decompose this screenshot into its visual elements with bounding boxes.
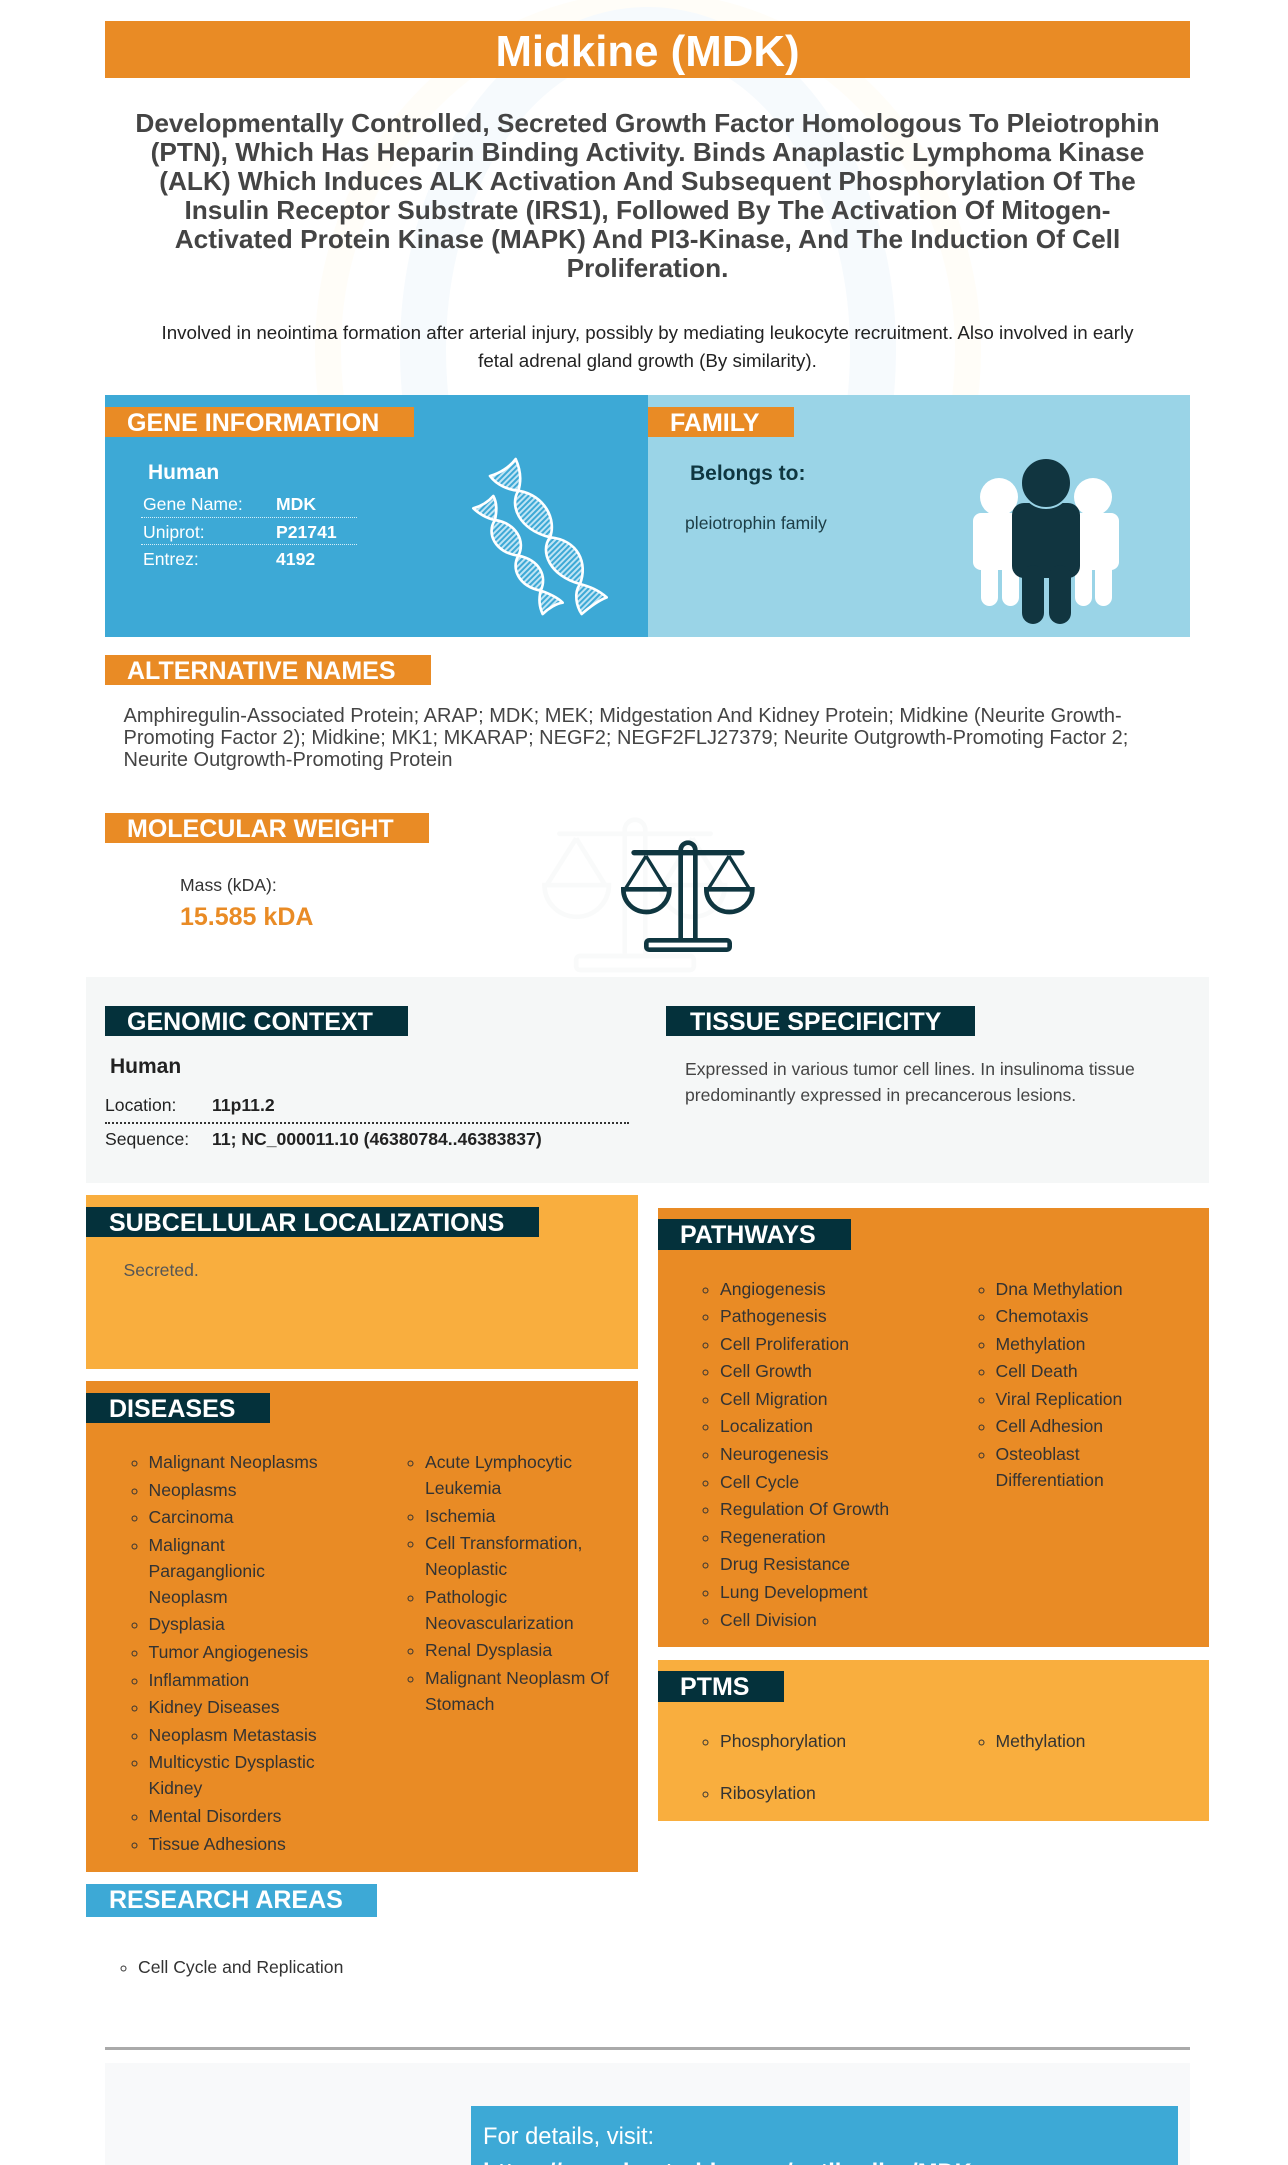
localization text: Secreted. bbox=[124, 1260, 199, 1280]
diseases list column 1 bbox=[132, 1452, 318, 1854]
mass label: Mass (kDA): bbox=[180, 875, 277, 895]
panel: PTMs bbox=[658, 1660, 1209, 1821]
diseases list column 2: Acute Lymphocytic bbox=[425, 1452, 572, 1472]
diseases list column 1: Kidney Diseases bbox=[148, 1697, 280, 1717]
heading: gene information: GENE INFORMATION bbox=[127, 409, 379, 437]
diseases list column 2: Neovascularization bbox=[425, 1613, 574, 1633]
heading: pathways: PATHWAYS bbox=[680, 1221, 816, 1249]
pathways list column 2: Viral Replication bbox=[996, 1389, 1122, 1409]
pathways list column 1: Cell Division bbox=[720, 1610, 817, 1630]
diseases list column 1: Inflammation bbox=[148, 1670, 249, 1690]
gene details table: 4192 bbox=[276, 549, 315, 569]
diseases list column 2 bbox=[408, 1452, 609, 1714]
pathways list column 2: Methylation bbox=[996, 1334, 1085, 1354]
species label: Human bbox=[110, 1055, 181, 1078]
icon: balance scale bbox=[621, 840, 755, 952]
alternative names text bbox=[124, 705, 1128, 771]
alternative names text: Neurite Outgrowth-Promoting Protein bbox=[124, 749, 453, 771]
alternative names text: Amphiregulin-Associated Protein; ARAP; MDK; MEK; Midgestation And Kidney Protein; Midkine (Neurite Growth- bbox=[124, 705, 1122, 727]
heading: family bbox=[648, 407, 794, 437]
location row: Location: bbox=[105, 1095, 176, 1115]
diseases list column 1: Dysplasia bbox=[148, 1614, 225, 1634]
pathways list column 2: Differentiation bbox=[996, 1470, 1104, 1490]
pathways list column 1 bbox=[702, 1278, 889, 1630]
panel: diseases bbox=[86, 1381, 638, 1872]
PTM list column 1: Phosphorylation bbox=[720, 1731, 846, 1751]
heading: PTMs: PTMS bbox=[680, 1673, 749, 1701]
tissue specificity text: predominantly expressed in precancerous lesions. bbox=[685, 1085, 1076, 1105]
research areas list: Cell Cycle and Replication bbox=[138, 1957, 343, 1977]
subtitle description: (ALK) Which Induces ALK Activation And Subsequent Phosphorylation Of The bbox=[159, 166, 1136, 196]
subtitle description: Developmentally Controlled, Secreted Growth Factor Homologous To Pleiotrophin bbox=[135, 108, 1160, 138]
heading: diseases bbox=[86, 1393, 270, 1423]
pathways list column 1: Pathogenesis bbox=[720, 1306, 827, 1326]
icon: DNA helix bbox=[472, 458, 608, 616]
location row: 11p11.2 bbox=[212, 1095, 275, 1115]
gene details table: Gene Name: bbox=[143, 494, 243, 514]
subtitle description bbox=[135, 108, 1160, 283]
heading: pathways bbox=[658, 1219, 851, 1250]
pathways list column 1: Cell Growth bbox=[720, 1361, 812, 1381]
pathways list column 1: Neurogenesis bbox=[720, 1444, 829, 1464]
diseases list column 2: Leukemia bbox=[425, 1478, 501, 1498]
diseases list column 1: Malignant Neoplasms bbox=[148, 1452, 318, 1472]
PTM list column 1 bbox=[702, 1731, 846, 1803]
pathways list column 1: Lung Development bbox=[720, 1582, 868, 1602]
callout: details link: For details, visit: bbox=[483, 2124, 654, 2150]
sequence row: 11; NC_000011.10 (46380784..46383837) bbox=[212, 1129, 542, 1149]
diseases list column 1: Paraganglionic bbox=[148, 1561, 265, 1581]
callout: details link bbox=[471, 2106, 1178, 2165]
gene details table: MDK bbox=[276, 494, 316, 514]
pathways list column 1: Regulation Of Growth bbox=[720, 1499, 889, 1519]
species label: Human bbox=[148, 461, 219, 484]
diseases list column 2: Ischemia bbox=[425, 1506, 495, 1526]
heading: subcellular localizations: SUBCELLULAR LOCALIZATIONS bbox=[109, 1209, 504, 1237]
panel: genomic context and tissue specificity bbox=[86, 977, 1209, 1183]
heading: tissue specificity: TISSUE SPECIFICITY bbox=[690, 1008, 941, 1036]
gene details table: Entrez: bbox=[143, 549, 199, 569]
pathways list column 1: Cell Proliferation bbox=[720, 1334, 849, 1354]
belongs to label: Belongs to: bbox=[690, 462, 806, 485]
heading: molecular weight: MOLECULAR WEIGHT bbox=[127, 815, 394, 843]
panel: footer bbox=[105, 2063, 1190, 2165]
pathways list column 1: Cell Cycle bbox=[720, 1472, 799, 1492]
title banner bbox=[105, 21, 1190, 78]
diseases list column 2: Pathologic bbox=[425, 1587, 507, 1607]
pathways list column 1: Drug Resistance bbox=[720, 1554, 850, 1574]
diseases list column 1: Malignant bbox=[148, 1535, 225, 1555]
pathways list column 1: Cell Migration bbox=[720, 1389, 828, 1409]
diseases list column 1: Tumor Angiogenesis bbox=[148, 1642, 308, 1662]
pathways list column 1: Angiogenesis bbox=[720, 1278, 826, 1298]
panel: subcellular localizations bbox=[86, 1195, 638, 1369]
title banner: Midkine (MDK) bbox=[495, 27, 800, 76]
function text: Involved in neointima formation after arterial injury, possibly by mediating leukocyte recruitment. Also involved in early bbox=[162, 322, 1134, 343]
pathways list column 1: Localization bbox=[720, 1416, 813, 1436]
diseases list column 2: Malignant Neoplasm Of bbox=[425, 1668, 609, 1688]
heading: genomic context: GENOMIC CONTEXT bbox=[127, 1008, 373, 1036]
background watermark logo bbox=[400, 7, 896, 395]
PTM list column 2: Methylation bbox=[996, 1731, 1085, 1751]
mass value: 15.585 kDA bbox=[180, 903, 313, 931]
tissue specificity text: Expressed in various tumor cell lines. In insulinoma tissue bbox=[685, 1059, 1135, 1079]
panel: gene information bbox=[105, 395, 648, 637]
diseases list column 2: Renal Dysplasia bbox=[425, 1640, 552, 1660]
diseases list column 1: Mental Disorders bbox=[148, 1806, 281, 1826]
function text bbox=[162, 322, 1134, 371]
diseases list column 1: Neoplasms bbox=[148, 1480, 237, 1500]
diseases list column 2: Cell Transformation, bbox=[425, 1533, 582, 1553]
pathways list column 2 bbox=[978, 1278, 1123, 1490]
function text: fetal adrenal gland growth (By similarity). bbox=[478, 350, 817, 371]
pathways list column 2: Osteoblast bbox=[996, 1444, 1080, 1464]
location row bbox=[105, 1095, 275, 1115]
heading: family: FAMILY bbox=[670, 409, 759, 437]
pathways list column 2: Chemotaxis bbox=[996, 1306, 1088, 1326]
diseases list column 1: Multicystic Dysplastic bbox=[148, 1752, 315, 1772]
diseases list column 1: Tissue Adhesions bbox=[148, 1834, 286, 1854]
sequence row: Sequence: bbox=[105, 1129, 189, 1149]
subtitle description: Insulin Receptor Substrate (IRS1), Followed By The Activation Of Mitogen- bbox=[184, 195, 1111, 225]
diseases list column 1: Neoplasm Metastasis bbox=[148, 1725, 317, 1745]
subtitle description: Proliferation. bbox=[567, 253, 728, 283]
family name: pleiotrophin family bbox=[685, 513, 827, 533]
heading: alternative names: ALTERNATIVE NAMES bbox=[127, 657, 396, 685]
diseases list column 2: Neoplastic bbox=[425, 1559, 507, 1579]
pathways list column 2: Cell Adhesion bbox=[996, 1416, 1103, 1436]
pathways list column 2: Cell Death bbox=[996, 1361, 1078, 1381]
pathways list column 2: Dna Methylation bbox=[996, 1278, 1123, 1298]
alternative names text: Promoting Factor 2); Midkine; MK1; MKARAP; NEGF2; NEGF2FLJ27379; Neurite Outgrowth-Promoting Factor 2; bbox=[124, 727, 1128, 749]
gene details table bbox=[141, 494, 357, 569]
heading: research areas: RESEARCH AREAS bbox=[109, 1886, 343, 1914]
subtitle description: (PTN), Which Has Heparin Binding Activity. Binds Anaplastic Lymphoma Kinase bbox=[151, 137, 1144, 167]
heading: diseases: DISEASES bbox=[109, 1395, 235, 1423]
diseases list column 2: Stomach bbox=[425, 1694, 494, 1714]
subtitle description: Activated Protein Kinase (MAPK) And PI3-Kinase, And The Induction Of Cell bbox=[175, 224, 1120, 254]
gene details table: Uniprot: bbox=[143, 522, 205, 542]
PTM list column 1: Ribosylation bbox=[720, 1783, 816, 1803]
heading: PTMs bbox=[658, 1671, 784, 1702]
heading: research areas bbox=[86, 1884, 377, 1917]
panel: family bbox=[648, 395, 1190, 637]
pathways list column 1: Regeneration bbox=[720, 1527, 826, 1547]
icon: people bbox=[973, 459, 1119, 624]
diseases list column 1: Carcinoma bbox=[148, 1507, 234, 1527]
diseases list column 1: Neoplasm bbox=[148, 1587, 228, 1607]
panel: pathways bbox=[658, 1208, 1209, 1647]
tissue specificity text bbox=[685, 1059, 1135, 1105]
diseases list column 1: Kidney bbox=[148, 1778, 202, 1798]
gene details table: P21741 bbox=[276, 522, 337, 542]
